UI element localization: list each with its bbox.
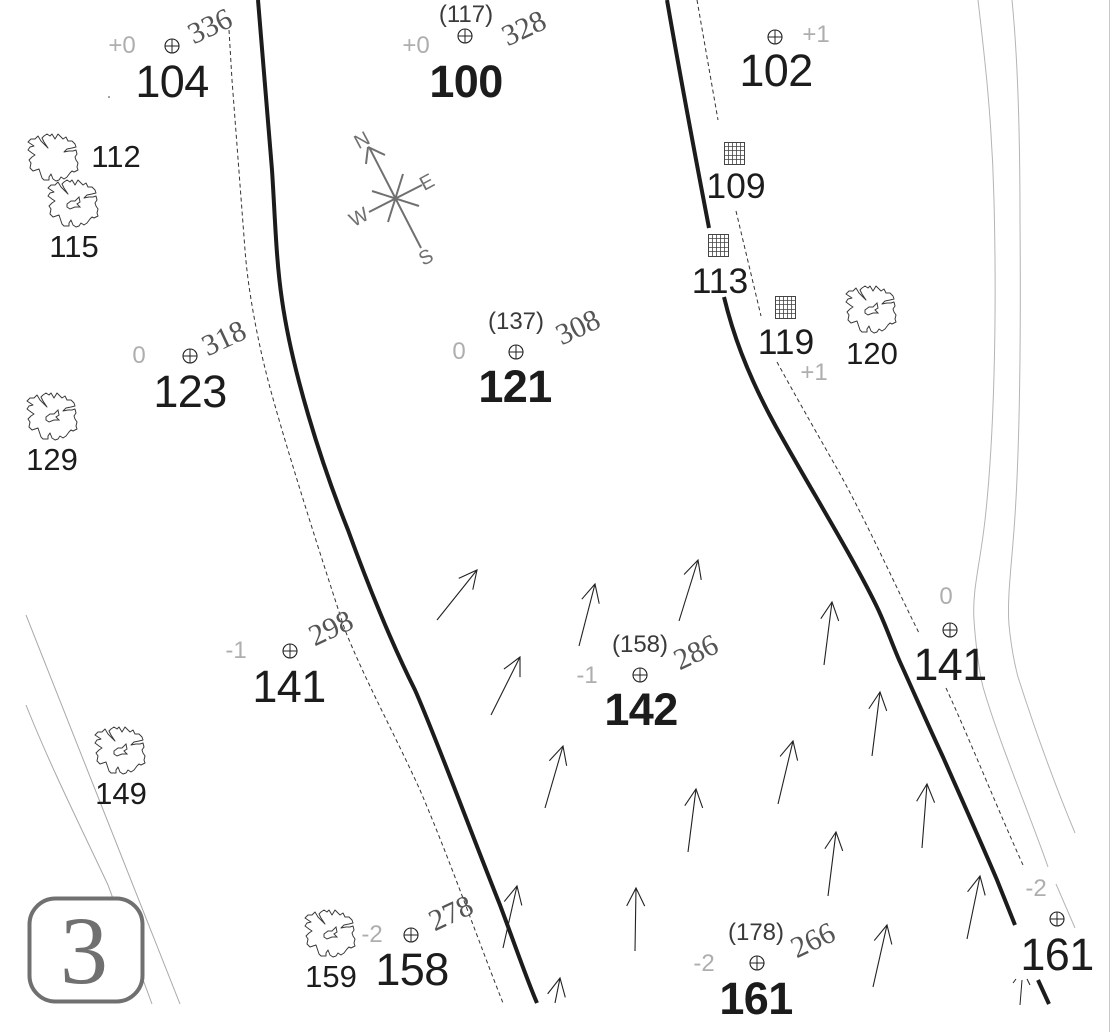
- icon: compass rose: W: [346, 204, 373, 232]
- tree labels: 115: [49, 229, 99, 264]
- station 142: 286: [669, 628, 723, 677]
- sheet number badge: 3: [60, 897, 108, 1004]
- station 141 right: 0: [939, 583, 953, 610]
- icon: compass rose: E: [416, 170, 438, 196]
- icon: compass rose: [346, 128, 438, 271]
- thick road left: [258, 0, 537, 1003]
- station 141 left: [225, 604, 358, 712]
- station 123: 123: [153, 366, 227, 417]
- station 123: [132, 314, 251, 417]
- station 161 right: 161: [1020, 929, 1094, 980]
- building labels: [692, 166, 828, 386]
- station 141 left: -1: [225, 637, 247, 664]
- station 161 bottom: [693, 916, 840, 1024]
- grey contour lines: bottom left: [26, 615, 180, 1004]
- station 100: [402, 1, 551, 107]
- station 102: 102: [739, 45, 813, 96]
- icon: compass rose: N: [351, 128, 374, 154]
- trees: [27, 134, 896, 957]
- station 104: 104: [135, 56, 209, 107]
- station 158: 278: [424, 889, 478, 938]
- tree labels: [26, 139, 898, 994]
- dashed path right: [697, 0, 1023, 865]
- station 142: 142: [604, 684, 678, 735]
- building labels: 109: [706, 166, 766, 206]
- station 141 left: 298: [304, 604, 358, 653]
- station 123: 318: [197, 314, 251, 363]
- station 100: (117): [439, 1, 493, 28]
- station 121: 121: [478, 361, 552, 412]
- station 161 right: [1020, 875, 1094, 980]
- wind arrows: [437, 560, 980, 1003]
- station 158: [361, 889, 478, 995]
- station 161 right: -2: [1025, 875, 1047, 902]
- station 100: 100: [429, 56, 503, 107]
- station 104: +0: [108, 32, 136, 59]
- tree labels: 129: [26, 442, 78, 477]
- station 141 left: 141: [252, 661, 326, 712]
- station 161 bottom: -2: [693, 950, 715, 977]
- station 123: 0: [132, 342, 146, 369]
- station 102: [739, 21, 830, 96]
- station 141 right: [913, 583, 987, 690]
- grey contour lines: river, top right: [974, 0, 1075, 928]
- cut-off arrow near bottom right: [1013, 979, 1030, 1005]
- station 158: -2: [361, 921, 383, 948]
- station 142: (158): [612, 631, 668, 658]
- dashed path left: [229, 30, 503, 1003]
- station 104: [108, 2, 237, 107]
- thick road right: [667, 0, 1049, 1004]
- station 100: +0: [402, 32, 430, 59]
- icon: compass rose: S: [415, 245, 437, 271]
- building labels: 113: [692, 261, 748, 301]
- tree labels: 112: [91, 139, 141, 174]
- station 142: [576, 628, 723, 735]
- station 121: (137): [488, 308, 544, 335]
- station 102: +1: [802, 21, 830, 48]
- station 142: -1: [576, 662, 598, 689]
- station 158: 158: [375, 944, 449, 995]
- tree labels: 149: [95, 776, 147, 811]
- station 161 bottom: (178): [728, 919, 784, 946]
- station 121: 308: [551, 303, 605, 352]
- station 121: [452, 303, 605, 412]
- sheet number badge: [30, 897, 142, 1004]
- station 161 bottom: 266: [786, 916, 840, 965]
- station 161 bottom: 161: [719, 973, 793, 1024]
- tree labels: 159: [305, 959, 357, 994]
- building labels: 119: [758, 322, 814, 362]
- building markers: [708, 142, 796, 318]
- station 100: 328: [497, 4, 551, 53]
- building labels: +1: [800, 359, 828, 386]
- station 121: 0: [452, 338, 466, 365]
- tree labels: 120: [846, 336, 898, 371]
- station 104: 336: [183, 2, 237, 51]
- station 141 right: 141: [913, 639, 987, 690]
